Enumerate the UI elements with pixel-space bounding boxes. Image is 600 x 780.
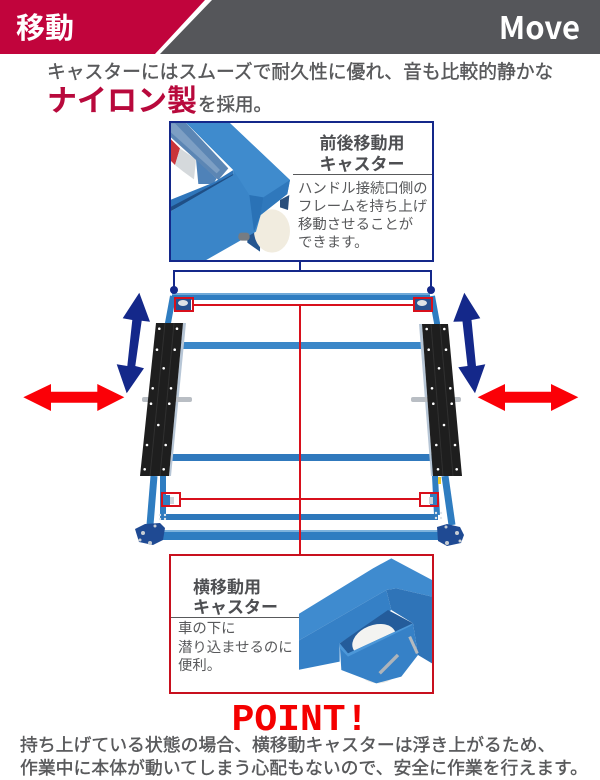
closing note — [20, 735, 588, 778]
closing note: 作業中に本体が動いてしまう心配もないので、安全に作業を行えます。 — [20, 758, 588, 778]
divider — [293, 174, 432, 175]
navy connector lines — [170, 261, 435, 294]
frame rails — [150, 296, 452, 525]
description — [298, 180, 428, 251]
heading: front-back caster: 前後移動用 — [320, 133, 404, 153]
intro line 1: キャスターにはスムーズで耐久性に優れ、音も比較的静かな — [47, 61, 553, 82]
description: フレームを持ち上げ — [298, 198, 428, 215]
header: grey band — [160, 0, 600, 54]
header band — [0, 0, 600, 54]
heading: front-back caster: キャスター — [320, 155, 404, 174]
intro line 2: ナイロン製を採用。 — [47, 85, 272, 118]
panel: front-back casters — [170, 120, 433, 262]
product diagram: frame — [135, 293, 464, 546]
heading: front-back caster — [320, 133, 404, 174]
left black plate — [140, 323, 183, 476]
closing note: 持ち上げている状態の場合、横移動キャスターは浮き上がるため、 — [20, 735, 555, 755]
description: 潜り込ませるのに — [178, 639, 293, 656]
photo: sideways caster — [298, 558, 432, 683]
heading: Japanese: 移動 — [16, 12, 74, 45]
panel: sideways casters — [170, 555, 433, 693]
side plate supports — [142, 323, 461, 476]
cross bars — [158, 293, 442, 540]
panel frame — [170, 122, 433, 261]
bottom frame bolts — [159, 512, 442, 520]
description: 便利。 — [178, 657, 221, 674]
heading: sideways caster: 横移動用 — [193, 578, 261, 597]
left wheel assembly — [135, 523, 165, 545]
intro text — [47, 61, 553, 118]
description: 移動させることが — [298, 216, 413, 233]
divider — [171, 617, 299, 618]
right wheel assembly — [437, 524, 464, 546]
arrow: right red — [478, 384, 578, 411]
photo: front-back caster — [170, 120, 290, 262]
description: ハンドル接続口側の — [298, 180, 428, 197]
arrow: left navy — [117, 293, 150, 393]
right black plate — [422, 324, 462, 484]
arrow: left red — [23, 384, 124, 411]
red connector lines and markers — [162, 298, 438, 554]
POINT heading: POINT! — [232, 699, 368, 742]
description — [178, 620, 293, 674]
corner casters in frame — [164, 298, 436, 505]
heading: sideways caster: キャスター — [193, 598, 278, 617]
arrow: right navy — [453, 293, 485, 393]
description: 車の下に — [178, 620, 236, 637]
heading: sideways caster — [193, 578, 278, 617]
heading: English: Move — [499, 3, 580, 48]
header: red tab — [0, 0, 205, 54]
panel frame — [170, 555, 433, 693]
description: できます。 — [298, 234, 369, 251]
